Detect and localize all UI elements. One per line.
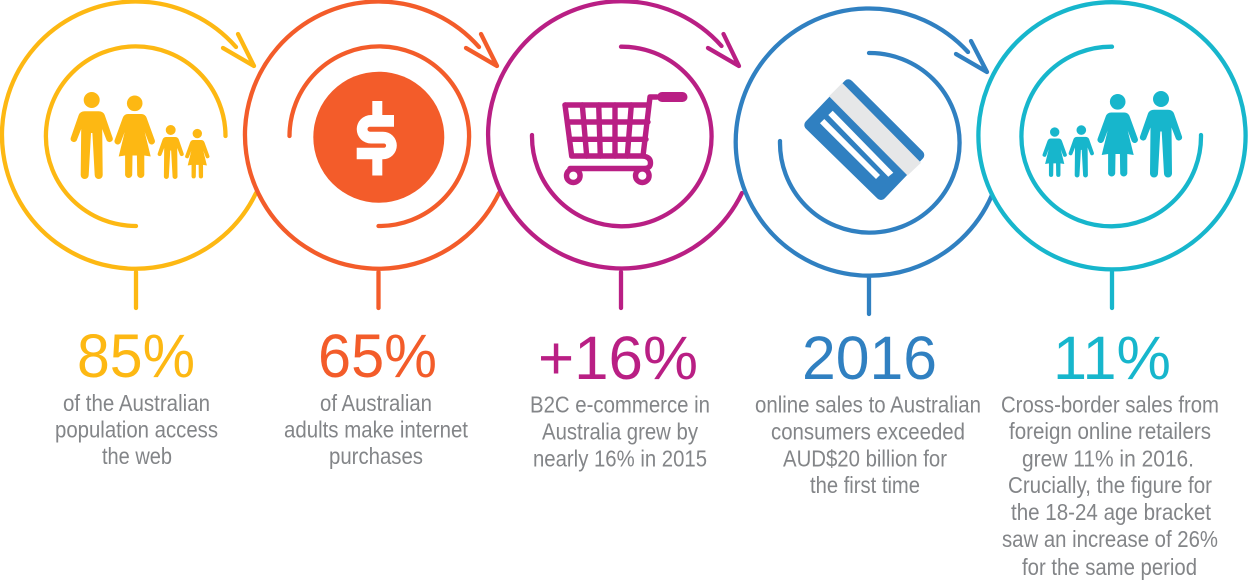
description: B2C growth: nearly 16% in 2015 (533, 446, 707, 472)
description: web access: of the Australian (63, 390, 210, 416)
panel: 2016 online sales (736, 8, 992, 498)
description: web access (55, 390, 218, 469)
stat: 85%: 85% (77, 322, 195, 390)
description: cross-border sales: foreign online retailers (1009, 418, 1211, 444)
description: internet purchases: adults make internet (284, 416, 469, 442)
description: B2C growth (530, 392, 710, 472)
description: cross-border sales: the 18-24 age bracket (1011, 499, 1212, 525)
panel: +16% B2C growth (488, 1, 742, 472)
description: internet purchases: of Australian (320, 390, 432, 416)
description: online sales: consumers exceeded (771, 418, 965, 444)
description: online sales: AUD$20 billion for (783, 446, 947, 472)
stat: 65%: 65% (318, 322, 437, 390)
circular arrow: orange (245, 2, 499, 308)
panel: 85% web access (2, 2, 256, 469)
description: B2C growth: Australia grew by (542, 418, 698, 444)
description: B2C growth: B2C e-commerce in (530, 392, 710, 418)
description: web access: the web (102, 443, 172, 469)
description: online sales: the first time (810, 472, 920, 498)
description: cross-border sales: saw an increase of 26% (1002, 526, 1218, 552)
circular arrow: magenta (488, 1, 742, 308)
stat: 11%: 11% (1053, 324, 1171, 392)
description: internet purchases (284, 390, 469, 469)
panel: 11% cross-border sales (978, 2, 1246, 580)
description: cross-border sales: for the same period (1022, 554, 1197, 580)
icon: family of four (71, 92, 209, 179)
description: online sales: online sales to Australian (755, 392, 981, 418)
description: cross-border sales (1001, 392, 1219, 580)
panel: 65% internet purchases (245, 2, 499, 469)
circle with inner arc: teal (978, 2, 1246, 308)
circular arrow: yellow (2, 2, 256, 308)
description: cross-border sales: Crucially, the figure for (1008, 472, 1212, 498)
description: cross-border sales: Cross-border sales from (1001, 392, 1219, 418)
description: internet purchases: purchases (329, 443, 423, 469)
description: web access: population access (55, 416, 218, 442)
circular arrow: blue (736, 8, 992, 314)
icon: family of four, reversed (1043, 91, 1182, 178)
icon: shopping cart (565, 92, 688, 182)
description: online sales (755, 392, 981, 498)
icon: dollar coin (313, 72, 444, 203)
icon: credit card (809, 83, 921, 195)
description: cross-border sales: grew 11% in 2016. (1022, 446, 1194, 472)
stat: +16%: +16% (538, 324, 698, 392)
stat: 2016: 2016 (802, 324, 937, 392)
